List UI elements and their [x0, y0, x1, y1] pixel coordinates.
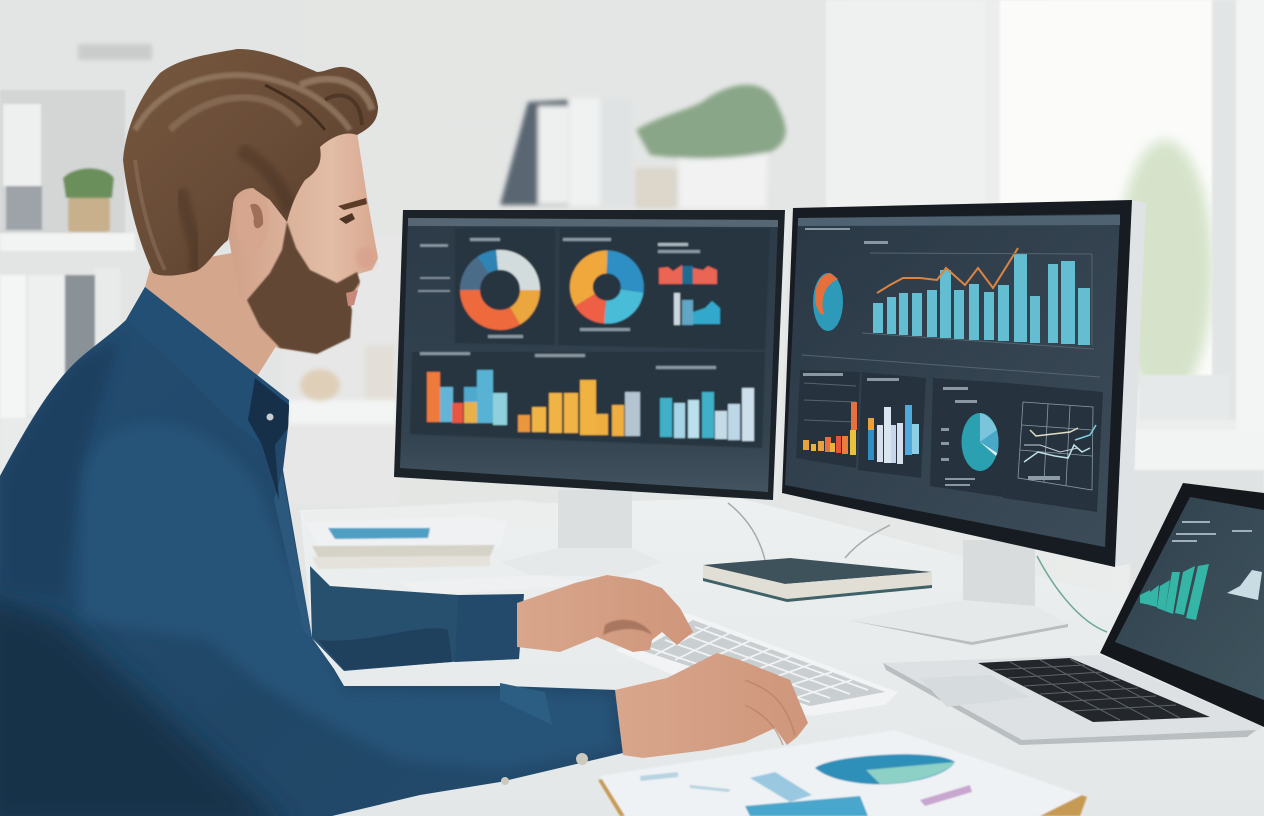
laptop chart	[1140, 564, 1209, 620]
back shelf behind head	[282, 235, 400, 505]
monitor two screen	[785, 214, 1120, 547]
neck	[145, 250, 280, 378]
bar chart middle	[518, 380, 640, 436]
monitor two lower panels	[796, 370, 1103, 512]
trend line	[877, 248, 1018, 293]
monitor one stand	[500, 490, 662, 577]
closed book on desk	[703, 558, 932, 602]
nose tip	[356, 247, 376, 269]
shirt placket	[274, 473, 312, 638]
monitor one top strip	[408, 218, 778, 227]
laptop lid	[1100, 483, 1264, 727]
monitor one	[394, 210, 790, 500]
chart grid	[802, 253, 1100, 422]
laptop caption bars	[1172, 521, 1252, 542]
collar dark inside	[248, 378, 289, 500]
monitor two	[782, 200, 1146, 567]
far hand	[517, 575, 693, 652]
hair	[123, 49, 378, 276]
donut chart two	[581, 262, 632, 312]
books on desk left	[303, 500, 600, 595]
notebook pie	[815, 754, 955, 784]
far sleeve	[310, 566, 520, 671]
monitor two stand	[848, 540, 1068, 645]
laptop	[883, 483, 1264, 745]
panel captions as faint bars	[418, 238, 716, 369]
bar chart large	[873, 254, 1090, 345]
collar button	[266, 414, 274, 420]
small bar chart blue	[868, 405, 919, 464]
ear inner	[250, 204, 263, 228]
pie chart	[962, 413, 998, 471]
monitor two top strip	[798, 215, 1120, 226]
monitor one charts	[410, 228, 770, 448]
beard	[247, 222, 360, 354]
monitor one bezel	[394, 210, 785, 500]
donut chart one	[470, 260, 530, 320]
left shelf	[0, 70, 148, 478]
hair strands	[135, 75, 372, 272]
bar chart left	[427, 370, 507, 425]
laptop side chart	[1227, 570, 1262, 600]
monitor one silver edge	[773, 210, 790, 500]
donut chart small	[813, 273, 843, 331]
line chart	[1018, 402, 1096, 490]
near hand	[615, 653, 808, 758]
small charts upper right	[658, 243, 720, 325]
eyebrow	[338, 198, 367, 210]
caption bars	[803, 228, 977, 486]
notebook charts	[750, 772, 812, 802]
shirt torso and near arm	[0, 287, 623, 816]
cables	[728, 503, 1107, 632]
bar chart right	[660, 388, 754, 441]
lips	[346, 290, 358, 306]
eye	[339, 213, 355, 224]
notebook in foreground	[598, 730, 1087, 816]
shirt collar	[126, 287, 289, 449]
near cuff fold	[500, 683, 552, 725]
chair edge	[0, 731, 34, 816]
laptop keyboard	[978, 658, 1210, 722]
person	[0, 49, 808, 816]
laptop base	[883, 655, 1263, 745]
far cuff	[455, 594, 524, 662]
monitor one screen	[400, 218, 778, 492]
far sleeve fold	[318, 628, 452, 670]
monitor two silver edge	[1112, 200, 1146, 567]
shirt shading	[0, 340, 615, 816]
laptop screen	[1115, 497, 1264, 700]
monitor two bezel	[782, 200, 1132, 567]
face	[220, 125, 378, 353]
small bar chart orange	[803, 402, 857, 455]
desk surface	[300, 498, 1264, 816]
cuff buttons	[501, 753, 588, 785]
window and wall column	[826, 0, 1264, 610]
keyboard	[615, 613, 898, 716]
trackpad	[920, 675, 1030, 707]
background binders and plant	[78, 44, 786, 208]
ear	[235, 192, 269, 254]
